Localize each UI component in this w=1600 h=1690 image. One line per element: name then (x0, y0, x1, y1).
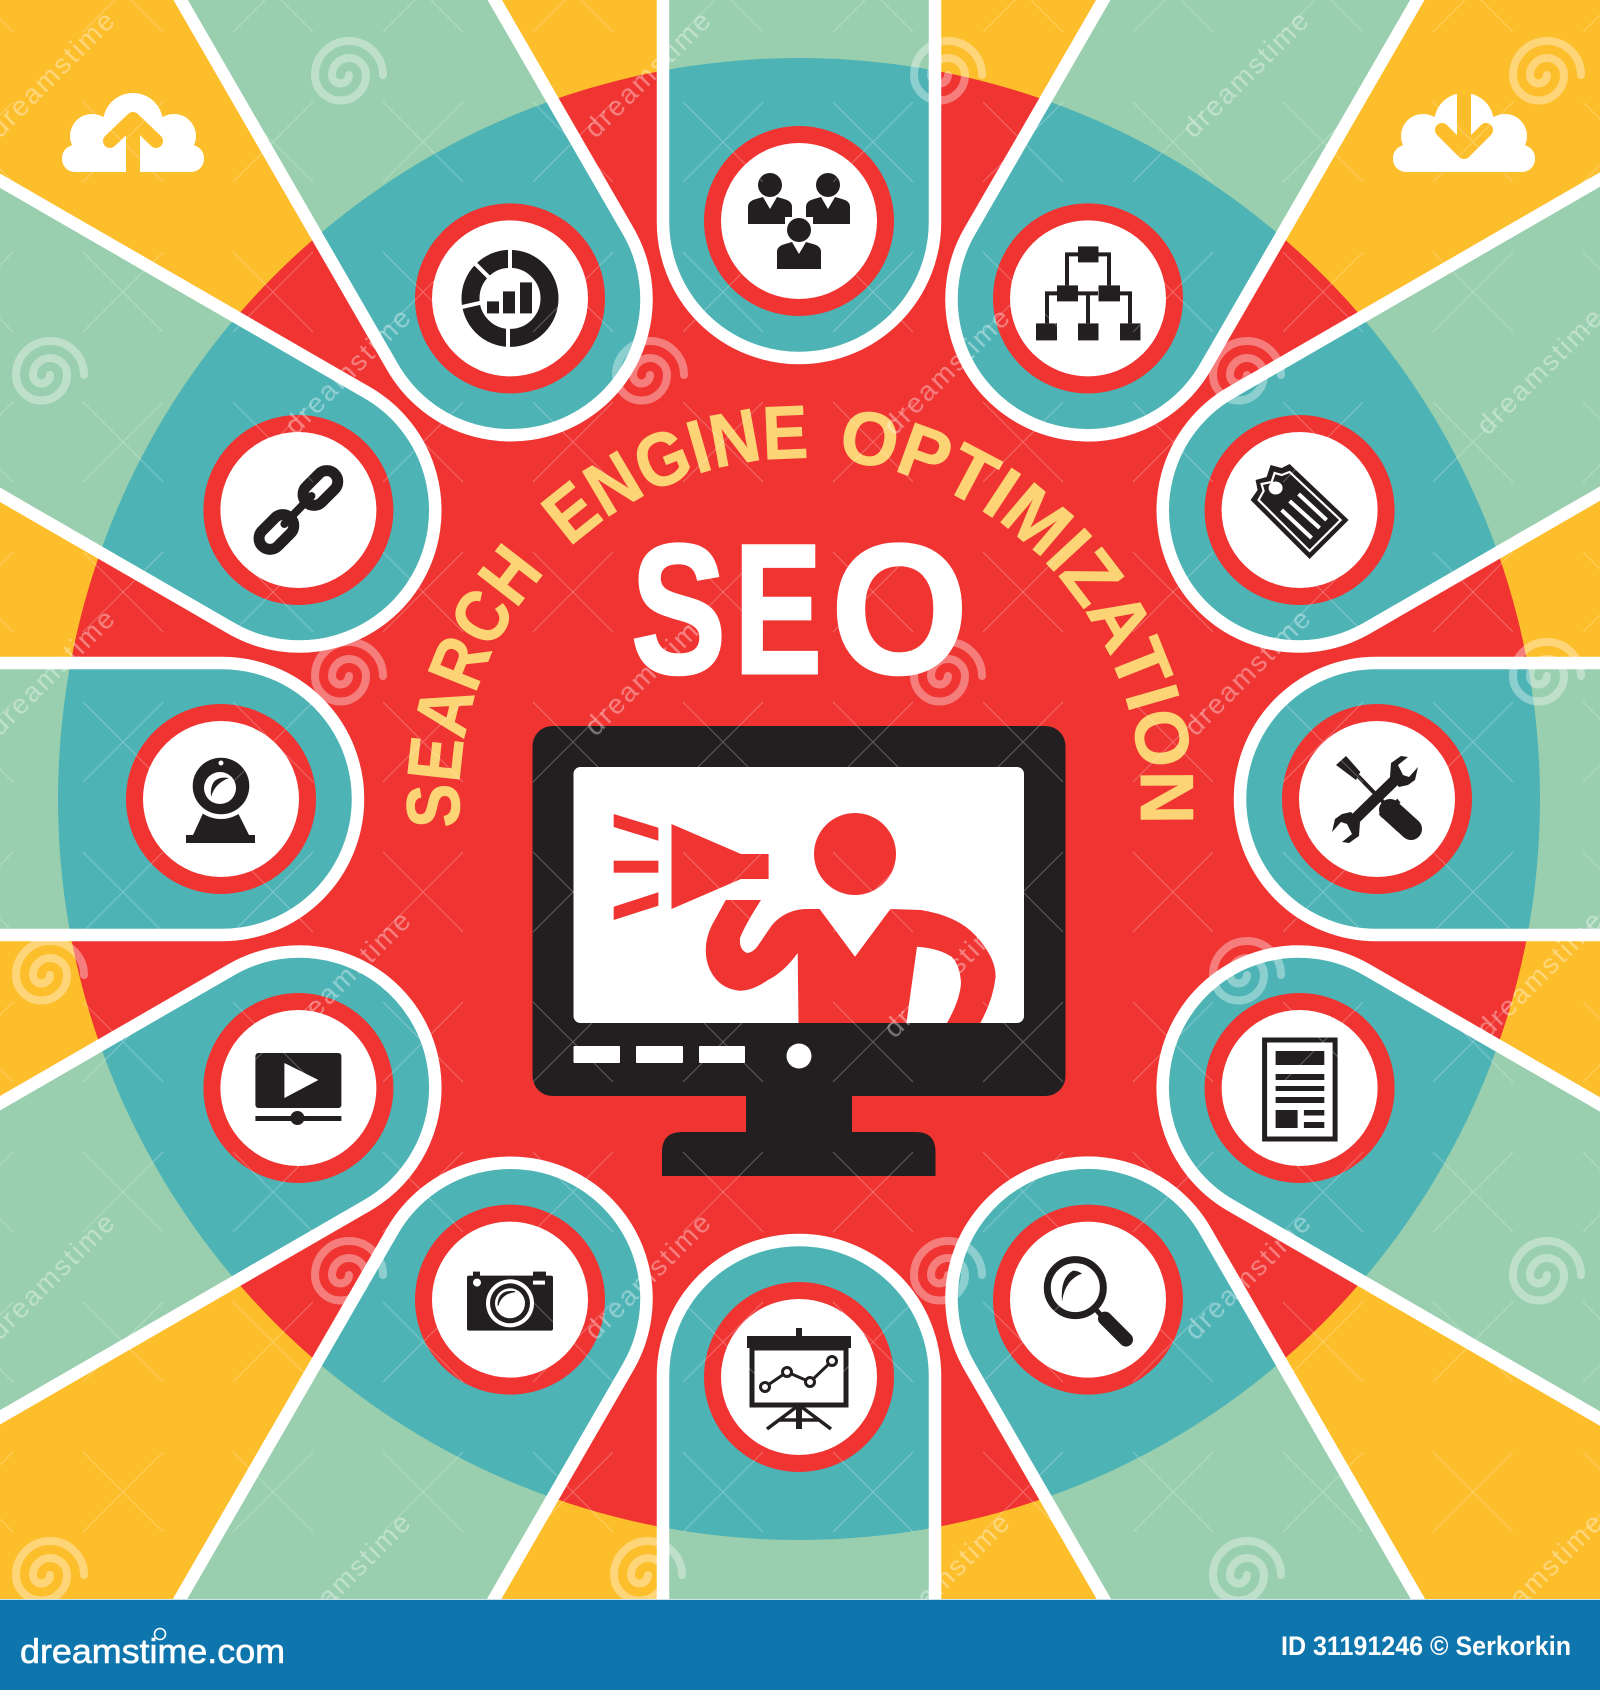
watermark text: dreamstime (877, 302, 1016, 441)
watermark text: dreamstime (578, 1207, 717, 1346)
icon: chain link (254, 466, 342, 554)
icon: camera (467, 1272, 553, 1331)
footer credit: ID 31191246 © Serkorkin (1281, 1631, 1571, 1661)
icon: three people (748, 173, 850, 271)
petal: analytics (175, 0, 646, 435)
petal: search (951, 1163, 1424, 1610)
watermark text: dreamstime (1178, 1207, 1317, 1346)
petal: webcam (0, 663, 358, 935)
title: SEO (631, 507, 968, 713)
petal: document (1163, 951, 1600, 1424)
watermark text: dreamstime (877, 905, 1016, 1044)
icon: webcam (186, 753, 255, 843)
icon: price tag (1251, 464, 1349, 559)
icon: article page (1265, 1040, 1335, 1139)
footer logo: dreamstime.com (20, 1633, 285, 1671)
icon: donut chart with bars (460, 248, 550, 348)
watermark text: dreamstime (877, 1507, 1016, 1646)
title: SEO: O (831, 507, 968, 713)
icon: cloud download (1393, 90, 1535, 172)
petal: tag (1163, 174, 1600, 646)
petal: presentation (663, 1240, 935, 1610)
footer bar (0, 1599, 1600, 1690)
petal: tools (1240, 663, 1600, 935)
petal: audience (663, 0, 935, 358)
monitor buttons (574, 1044, 812, 1068)
monitor (532, 726, 1066, 1176)
icon: screwdriver and wrench (1332, 756, 1418, 843)
watermark text: dreamstime (278, 1507, 417, 1646)
watermark text: dreamstime (278, 302, 417, 441)
icon: hierarchy (1036, 246, 1140, 340)
curved heading: search engine optimization: SEARCHENGINE OPTIMIZATION (406, 406, 1194, 826)
icon: presentation board with line chart (747, 1328, 851, 1429)
title: SEO: S (631, 507, 726, 713)
petal: links (0, 175, 435, 646)
petal: video (0, 951, 435, 1423)
watermark text: dreamstime (1178, 603, 1317, 742)
petal: site structure (951, 0, 1423, 435)
icon: video player (255, 1053, 341, 1125)
watermark text: dreamstime (1176, 5, 1315, 144)
icon: person with megaphone (614, 813, 996, 1023)
icon: magnifying glass (1047, 1260, 1126, 1340)
watermark text: dreamstime (278, 905, 417, 1044)
monitor screen (574, 767, 1024, 1023)
petal: photo (174, 1163, 646, 1610)
icon: cloud upload (62, 93, 204, 172)
watermark text: dreamstime (578, 5, 717, 144)
watermark text: dreamstime (578, 603, 717, 742)
title: SEO: E (734, 507, 822, 713)
